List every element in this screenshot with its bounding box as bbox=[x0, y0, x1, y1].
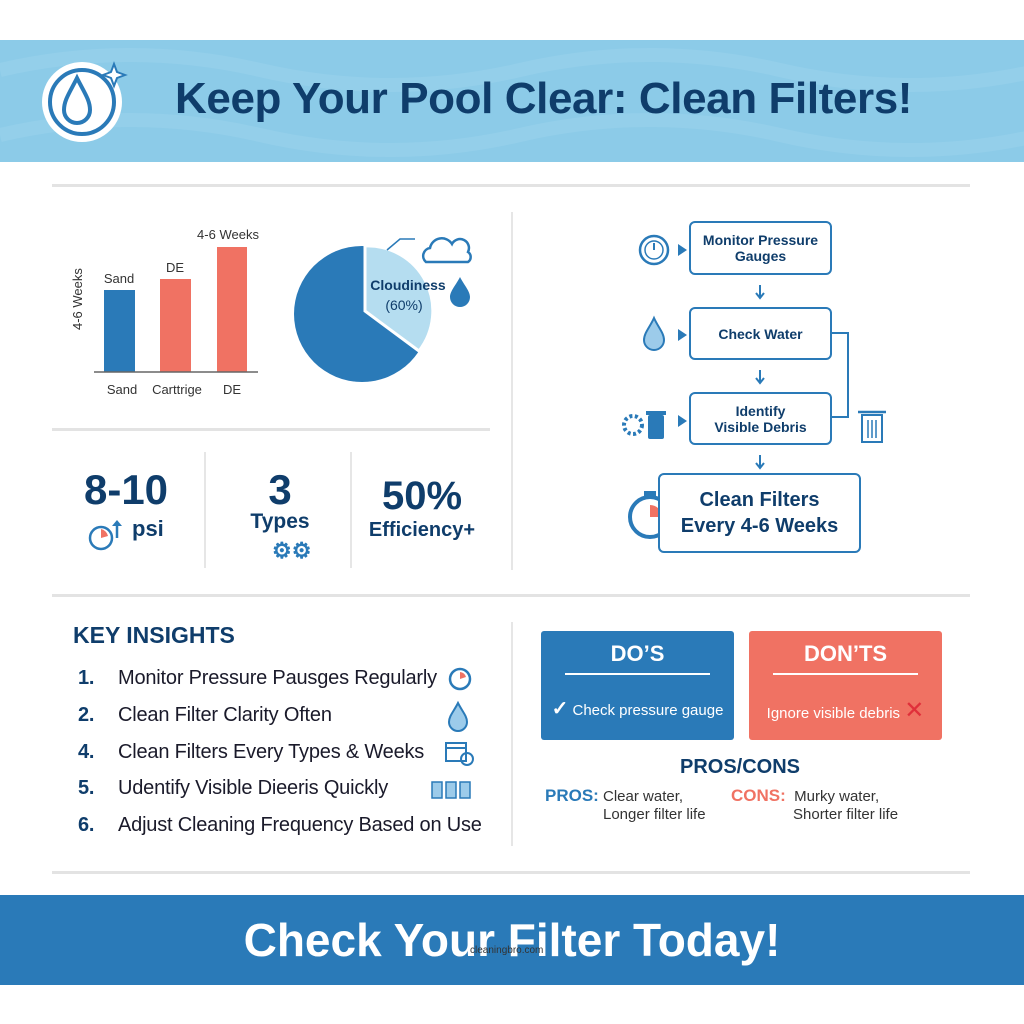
bar chart: DE bbox=[223, 382, 241, 397]
footer banner: cleaningbro.com bbox=[470, 945, 543, 956]
pie chart bbox=[294, 237, 472, 382]
key insights: Clean Filter Clarity Often bbox=[118, 704, 332, 726]
step 1: Monitor Pressure bbox=[703, 232, 818, 248]
do's box: DO’S bbox=[611, 641, 664, 666]
stat: efficiency: Efficiency+ bbox=[369, 519, 475, 541]
bar chart: Sand bbox=[107, 382, 137, 397]
bar chart: Carttrige bbox=[152, 382, 202, 397]
bar chart: 4-6 Weeks bbox=[70, 268, 85, 330]
footer banner: Check Your Filter Today! bbox=[244, 914, 780, 966]
don'ts box: Ignore visible debris ✕ bbox=[767, 697, 924, 724]
bar chart: Sand bbox=[104, 271, 134, 286]
icon: logo water drop bbox=[42, 61, 128, 142]
step 4 bbox=[658, 473, 861, 553]
key insights: Adjust Cleaning Frequency Based on Use bbox=[118, 814, 482, 836]
stat: psi: 8-10 bbox=[84, 466, 168, 513]
title: Keep Your Pool Clear: Clean Filters! bbox=[175, 74, 912, 123]
key insights: 6. bbox=[78, 814, 94, 836]
pie chart: (60%) bbox=[385, 297, 423, 313]
step 4: Clean Filters bbox=[699, 489, 820, 511]
bar chart: 4-6 Weeks bbox=[197, 227, 259, 242]
step 2 bbox=[689, 307, 832, 360]
don'ts box bbox=[749, 631, 942, 740]
don'ts box: DON’TS bbox=[804, 641, 887, 666]
key insights: 2. bbox=[78, 704, 94, 726]
flowchart bbox=[622, 221, 886, 553]
key insights: 4. bbox=[78, 741, 94, 763]
footer banner bbox=[0, 895, 1024, 985]
step 2: Check Water bbox=[718, 326, 803, 342]
do's box: ✓ Check pressure gauge bbox=[552, 698, 723, 720]
bar chart bbox=[70, 227, 259, 397]
key insights bbox=[73, 622, 482, 836]
step 3: Identify bbox=[736, 402, 785, 418]
stat: efficiency: 50% bbox=[382, 474, 462, 518]
key insights: KEY INSIGHTS bbox=[73, 622, 235, 648]
stat: efficiency bbox=[369, 474, 475, 541]
header band bbox=[0, 40, 1024, 162]
stat: types: ⚙⚙ bbox=[272, 538, 311, 563]
bar chart: DE bbox=[166, 260, 184, 275]
step 3 bbox=[689, 392, 832, 445]
pros/cons: Shorter filter life bbox=[793, 806, 898, 823]
key insights: Udentify Visible Dieeris Quickly bbox=[118, 777, 388, 799]
step 4: Every 4-6 Weeks bbox=[681, 515, 838, 537]
step 1: Gauges bbox=[735, 248, 786, 264]
pros/cons bbox=[545, 756, 898, 823]
stat: types bbox=[250, 466, 311, 563]
do's box bbox=[541, 631, 734, 740]
key insights: 1. bbox=[78, 667, 94, 689]
pros/cons: Longer filter life bbox=[603, 806, 706, 823]
pie chart: Cloudiness bbox=[370, 277, 446, 293]
key insights: Monitor Pressure Pausges Regularly bbox=[118, 667, 437, 689]
pros/cons: PROS: Clear water, bbox=[545, 786, 683, 805]
key insights: 5. bbox=[78, 777, 94, 799]
step 1 bbox=[689, 221, 832, 275]
pros/cons: PROS/CONS bbox=[680, 756, 800, 778]
stat: types: Types bbox=[250, 510, 310, 533]
pros/cons: CONS: Murky water, bbox=[731, 786, 879, 805]
stat: psi: psi bbox=[132, 516, 164, 541]
stat: types: 3 bbox=[268, 466, 292, 513]
step 3: Visible Debris bbox=[714, 418, 807, 434]
icons: list icons bbox=[431, 668, 474, 799]
stat: psi bbox=[84, 466, 168, 550]
key insights: Clean Filters Every Types & Weeks bbox=[118, 741, 424, 763]
